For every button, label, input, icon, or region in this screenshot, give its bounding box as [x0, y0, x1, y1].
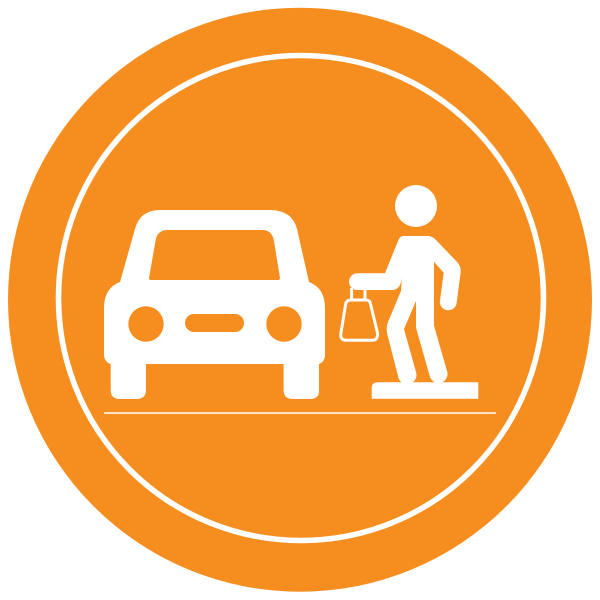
icon: person carrying bag — [341, 185, 478, 399]
body — [349, 236, 461, 384]
left headlight — [128, 306, 164, 342]
bag body — [341, 300, 378, 340]
right headlight — [266, 306, 302, 342]
bag — [341, 288, 378, 340]
grille — [185, 314, 244, 332]
icon: car front view — [104, 210, 325, 399]
head — [395, 185, 437, 227]
curb — [372, 382, 478, 399]
bag handles — [352, 288, 365, 300]
ground line — [104, 412, 496, 414]
white inner ring — [58, 56, 544, 540]
